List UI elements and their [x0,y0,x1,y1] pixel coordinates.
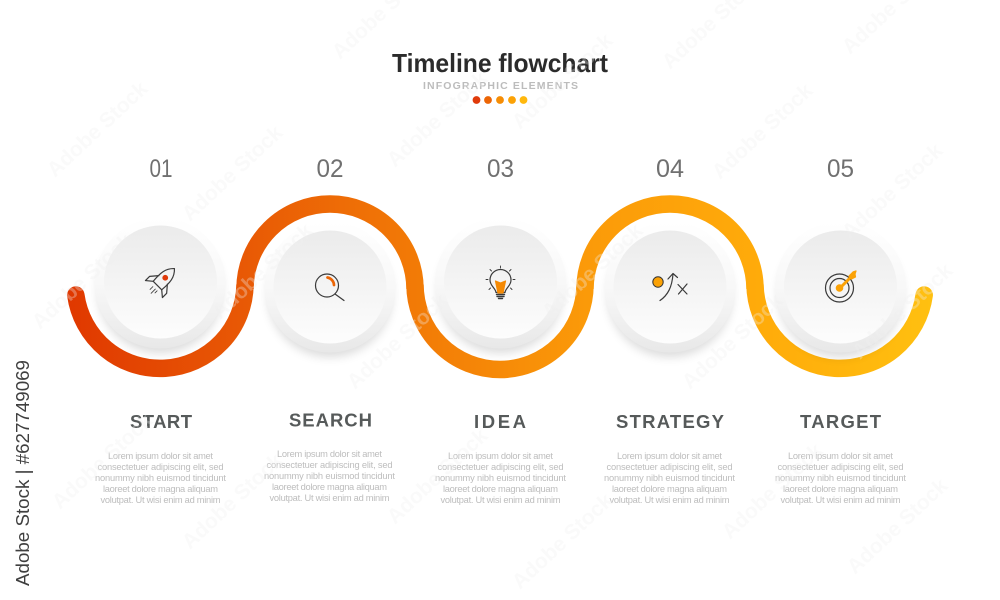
step numbers: 05 [827,155,854,183]
circle 2 [264,222,396,357]
text block: strategy: consectetuer adipiscing elit, sed [606,462,732,472]
watermark pattern: Adobe Stock [708,79,818,184]
title dots [473,96,527,104]
text block: target: consectetuer adipiscing elit, sed [778,462,904,472]
icon: rocket [142,260,183,301]
watermark pattern: Adobe Stock [843,474,953,579]
text block: search [264,449,395,503]
watermark pattern: Adobe Stock [28,229,138,334]
side credit: Adobe Stock | #627749069 [13,360,33,586]
watermark pattern: Adobe Stock [383,67,493,172]
heading: start: START [130,411,193,432]
text block: target: nonummy nibh euismod tincidunt [775,473,906,483]
text block: idea: volutpat. Ut wisi enim ad minim [440,495,561,505]
text block: target: laoreet dolore magna aliquam [783,484,898,494]
text block: start [95,451,226,505]
watermark pattern: Adobe Stock [508,29,618,134]
text block: start: Lorem ipsum dolor sit amet [108,451,213,461]
icon: light bulb [486,266,515,298]
watermark pattern: Adobe Stock [848,259,958,364]
text block: idea: laoreet dolore magna aliquam [443,484,558,494]
step numbers: 03 [487,155,514,183]
watermark pattern: Adobe Stock [43,77,153,182]
step numbers [150,155,854,183]
watermark pattern: Adobe Stock [178,121,288,226]
title: Timeline flowchart [392,48,608,78]
step numbers: 02 [316,155,344,183]
text block: search: volutpat. Ut wisi enim ad minim [270,493,390,503]
text block: start: laoreet dolore magna aliquam [103,484,218,494]
text block: start: volutpat. Ut wisi enim ad minim [100,495,221,505]
text block: strategy: volutpat. Ut wisi enim ad minim [610,495,730,505]
text block: target: volutpat. Ut wisi enim ad minim [780,495,901,505]
text block: strategy: nonummy nibh euismod tincidunt [604,473,735,483]
text block: idea [435,451,566,505]
watermark pattern: Adobe Stock [48,409,158,514]
text block: search: nonummy nibh euismod tincidunt [264,471,395,481]
watermark pattern: Adobe Stock [343,289,453,394]
circle 4 [604,222,736,357]
circle 5 [775,222,906,357]
text block: start: nonummy nibh euismod tincidunt [95,473,226,483]
heading: strategy: STRATEGY [616,411,725,432]
text block: search: Lorem ipsum dolor sit amet [277,449,382,459]
circle 3 [435,218,566,353]
text block: strategy: Lorem ipsum dolor sit amet [617,451,722,461]
watermark pattern: Adobe Stock [383,424,493,529]
watermark pattern: Adobe Stock [718,439,828,544]
text block: search: laoreet dolore magna aliquam [272,482,387,492]
icon: strategy play [653,274,687,300]
wavy timeline path [76,204,924,370]
text block: strategy [604,451,735,505]
circle 1 [94,218,226,353]
text block: start: consectetuer adipiscing elit, sed [98,462,224,472]
text block: idea: consectetuer adipiscing elit, sed [438,462,564,472]
text block: target: Lorem ipsum dolor sit amet [788,451,893,461]
text block: idea: nonummy nibh euismod tincidunt [435,473,566,483]
heading: search: SEARCH [289,410,372,430]
text block: target [775,451,906,505]
heading: idea: IDEA [474,411,526,432]
heading: target: TARGET [800,411,882,432]
watermark pattern: Adobe Stock [838,139,948,244]
watermark pattern: Adobe Stock [208,219,318,324]
watermark pattern: Adobe Stock [178,449,288,554]
subtitle: INFOGRAPHIC ELEMENTS [423,80,578,92]
text block: strategy: laoreet dolore magna aliquam [612,484,727,494]
watermark pattern: Adobe Stock [678,289,788,394]
watermark pattern: Adobe Stock [538,219,648,324]
step numbers: 01 [150,155,172,183]
text block: search: consectetuer adipiscing elit, sed [266,460,392,470]
text block: idea: Lorem ipsum dolor sit amet [448,451,553,461]
step numbers: 04 [656,155,684,183]
icon: magnifier [316,274,344,300]
watermark pattern: Adobe Stock [508,489,618,594]
icon: target [826,271,856,302]
